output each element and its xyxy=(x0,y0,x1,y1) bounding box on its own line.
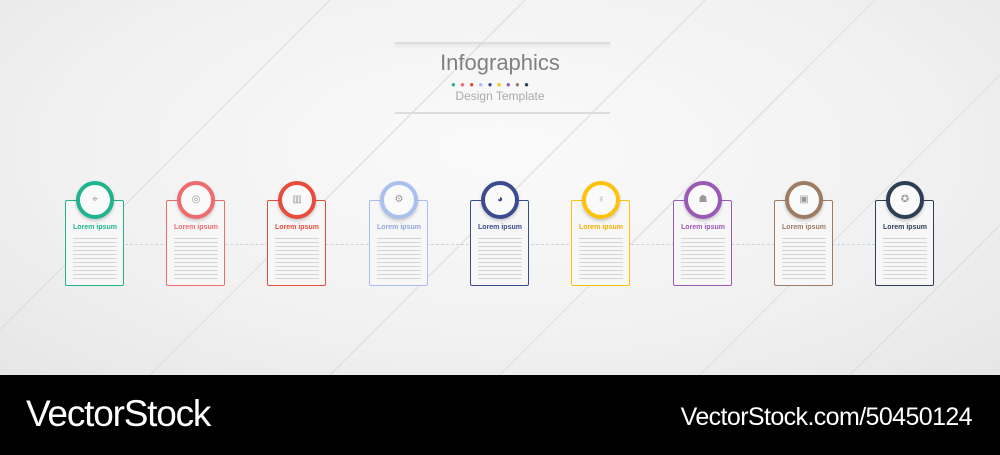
text: ◎ xyxy=(192,194,200,205)
text: Lorem ipsum xyxy=(377,224,421,231)
text: Lorem ipsum xyxy=(681,224,725,231)
footer url: VectorStock.com/50450124 xyxy=(681,403,972,431)
text: ✪ xyxy=(901,194,909,205)
text: Lorem ipsum xyxy=(782,224,826,231)
text: Lorem ipsum xyxy=(579,224,623,231)
text: Lorem ipsum xyxy=(73,224,117,231)
step 4 xyxy=(369,181,428,286)
step 3 xyxy=(267,181,326,286)
subtitle: Design Template xyxy=(455,89,545,103)
footer logo: VectorStock xyxy=(26,393,210,434)
text: ▥ xyxy=(292,194,302,205)
step 9 xyxy=(875,181,934,286)
dashed connector line xyxy=(95,244,905,245)
text: Lorem ipsum xyxy=(883,224,927,231)
step 7 xyxy=(673,181,732,286)
text: Lorem ipsum xyxy=(174,224,218,231)
text: Lorem ipsum xyxy=(275,224,319,231)
colored dots: ●●●●●●●●● xyxy=(451,80,533,89)
step 6 xyxy=(571,181,630,286)
step 2 xyxy=(166,181,225,286)
step 5 xyxy=(470,181,529,286)
text: Lorem ipsum xyxy=(478,224,522,231)
title block xyxy=(395,42,610,114)
text: ◕ xyxy=(497,194,503,205)
text: ▣ xyxy=(799,194,809,205)
footer bar xyxy=(0,375,1000,455)
title: Infographics xyxy=(440,50,560,75)
text: ☗ xyxy=(699,194,707,205)
text: ⚙ xyxy=(395,194,403,205)
text: ⌖ xyxy=(92,194,98,205)
step 1 xyxy=(65,181,124,286)
text: ♁ xyxy=(597,194,605,205)
step 8 xyxy=(774,181,833,286)
